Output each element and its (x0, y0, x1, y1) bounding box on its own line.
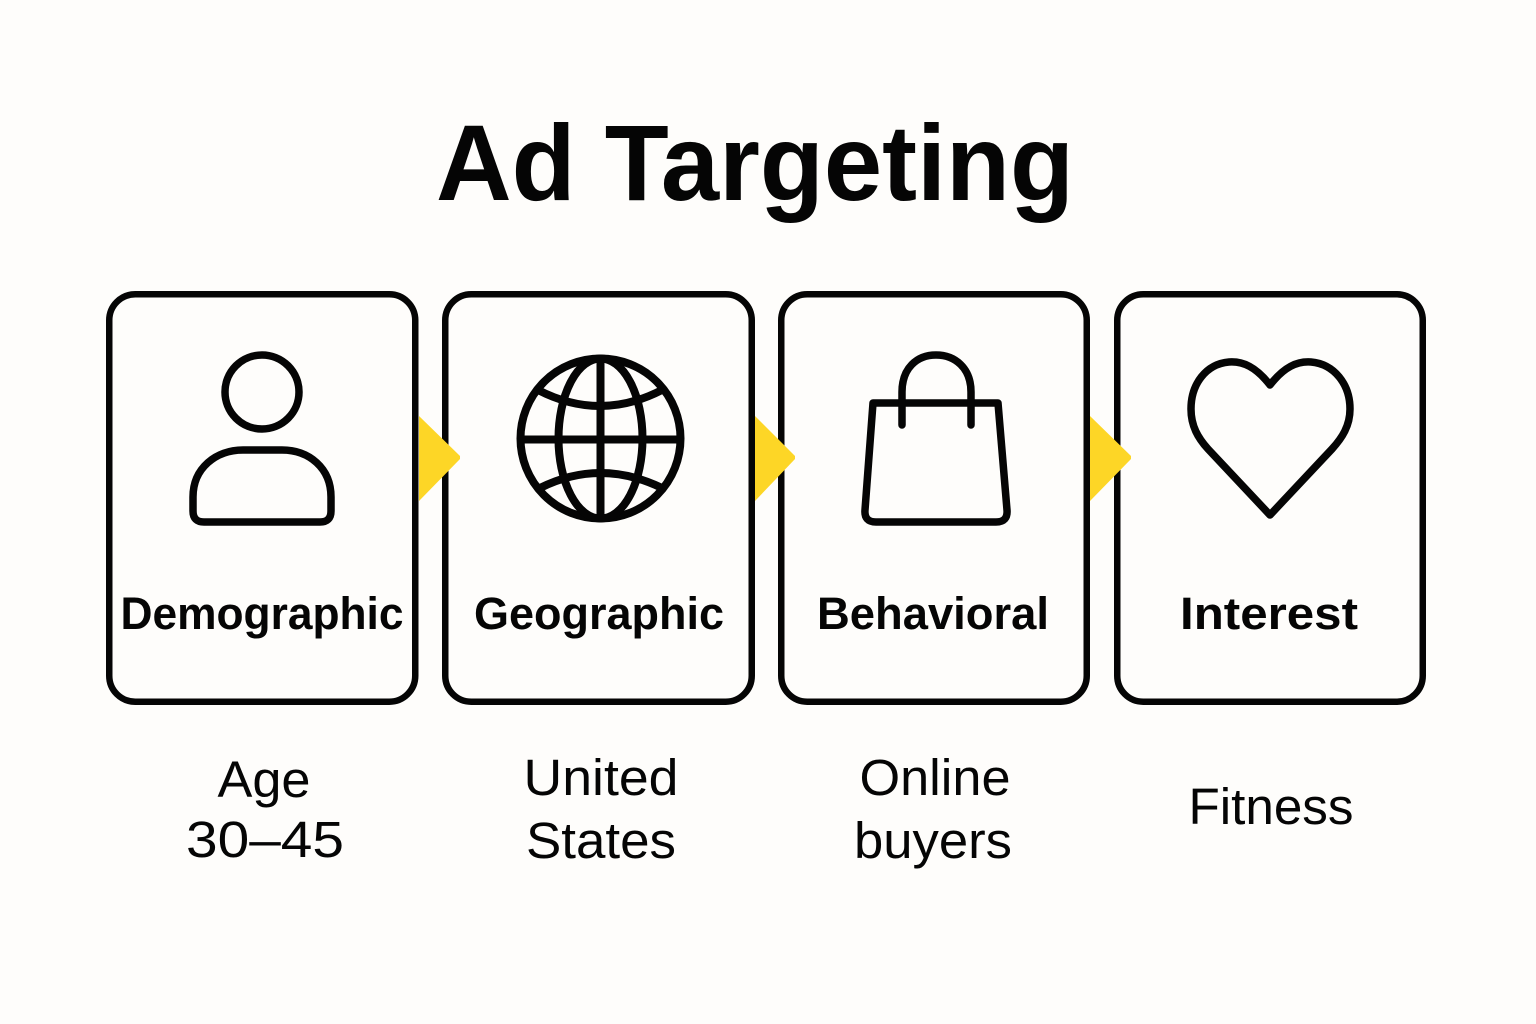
icon: person (193, 355, 331, 522)
panel: interest (1117, 294, 1423, 702)
label: behavioral: Behavioral (817, 588, 1049, 639)
caption: age: 30–45 (186, 811, 344, 868)
caption: age (186, 751, 344, 868)
panel: behavioral (781, 294, 1087, 702)
caption: interest: Fitness (1188, 778, 1354, 835)
panel: demographic (109, 294, 415, 702)
title: Ad Targeting (436, 102, 1074, 223)
caption: behavior (854, 749, 1012, 869)
arrow: demographic to geographic (419, 416, 460, 501)
label: geographic: Geographic (474, 588, 724, 639)
caption: location: States (526, 812, 676, 869)
label: interest: Interest (1180, 588, 1358, 639)
label: demographic: Demographic (120, 588, 404, 639)
icon: heart (1191, 362, 1350, 515)
arrow: behavioral to interest (1090, 416, 1131, 501)
caption: behavior: Online (860, 749, 1010, 806)
caption: location: United (524, 749, 678, 806)
icon: shopping bag (865, 355, 1007, 522)
caption: age: Age (218, 751, 310, 808)
caption: location (524, 749, 678, 869)
panel: geographic (445, 294, 752, 702)
icon: globe (520, 358, 681, 519)
caption: behavior: buyers (854, 812, 1012, 869)
arrow: geographic to behavioral (755, 416, 795, 501)
